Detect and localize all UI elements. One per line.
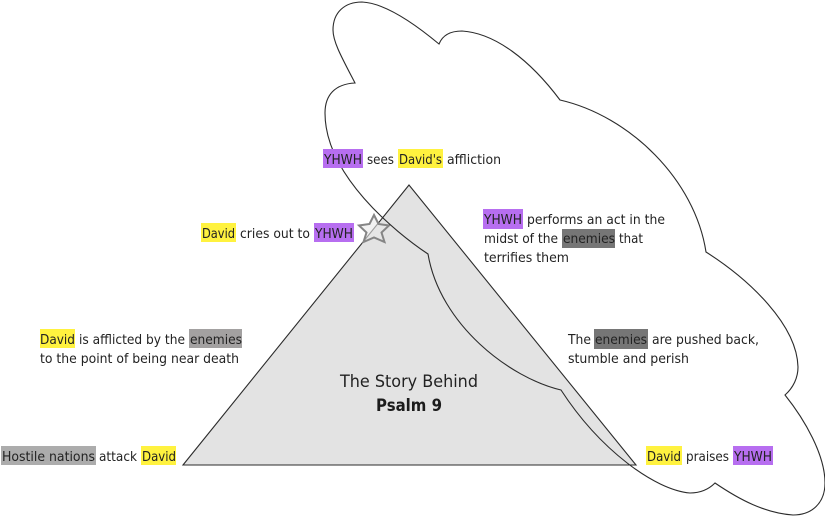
label: David cries out to YHWH: YHWH [314,226,353,242]
title: The Story Behind Psalm 9: Psalm 9 [376,396,442,416]
label: YHWH sees David's affliction: YHWH [323,152,362,168]
label: Hostile nations attack David: David [142,449,176,465]
label: YHWH performs an act: midst of the [484,231,558,247]
label: YHWH performs an act: performs an act in the [527,212,665,228]
label: David praises YHWH: David [647,449,681,465]
label: YHWH sees David's affliction: affliction [447,152,501,168]
label: enemies are pushed back [567,329,759,367]
label: David cries out to YHWH: cries out to [240,226,310,242]
title: The Story Behind Psalm 9 [339,372,478,416]
label: enemies are pushed back: stumble and perish [568,351,689,367]
label: enemies are pushed back: are pushed back, [652,332,759,348]
label: David is afflicted by the enemies [40,329,242,367]
triangle: story arc [183,185,636,465]
label: Hostile nations attack David: attack [99,449,137,465]
label: David cries out to YHWH [201,223,354,242]
label: YHWH sees David's affliction [323,149,501,168]
label: David praises YHWH: praises [686,449,729,465]
label: YHWH performs an act [483,209,665,266]
label: YHWH performs an act: enemies [563,231,615,247]
label: YHWH performs an act: YHWH [483,212,522,228]
label: David praises YHWH: YHWH [733,449,772,465]
label: David praises YHWH [646,446,773,465]
label: Hostile nations attack David [1,446,176,465]
cloud: divine intervention [325,2,825,515]
label: David is afflicted by the enemies: enemies [190,332,242,348]
label: YHWH performs an act: terrifies them [484,250,569,266]
label: enemies are pushed back: enemies [595,332,647,348]
label: enemies are pushed back: The [567,332,591,348]
label: Hostile nations attack David: Hostile nations [2,449,95,465]
label: David is afflicted by the enemies: David [40,332,75,348]
label: David cries out to YHWH: David [202,226,235,242]
label: YHWH performs an act: that [619,231,643,247]
star: turning point [359,215,389,242]
title: The Story Behind Psalm 9: The Story Behind [339,372,478,392]
label: David is afflicted by the enemies: to the point of being near death [40,351,239,367]
label: David is afflicted by the enemies: is afflicted by the [79,332,185,348]
label: YHWH sees David's affliction: sees [367,152,394,168]
label: YHWH sees David's affliction: David's [399,152,442,168]
